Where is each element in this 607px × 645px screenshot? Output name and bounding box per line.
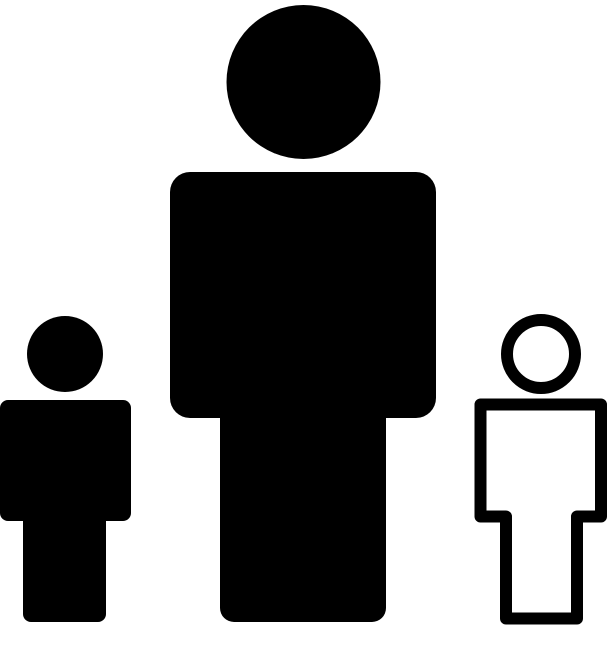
icon: large solid person <box>170 5 436 622</box>
icon: small outlined person right <box>480 320 601 618</box>
icon: small solid person left <box>0 316 131 622</box>
